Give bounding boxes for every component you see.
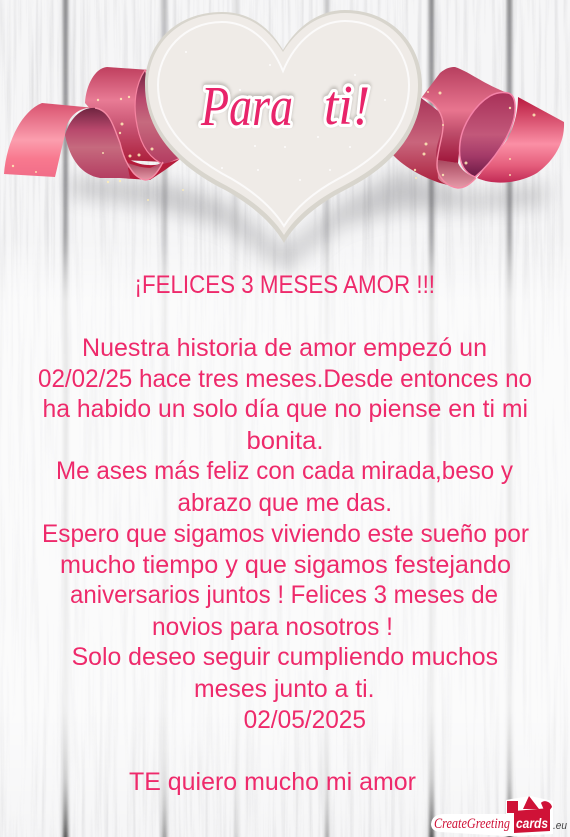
logo: CreateGreetingCards.eu (431, 796, 567, 836)
heart outer rim (145, 10, 422, 243)
paragraph 1 line 3: ha habido un solo día que no piense en ti mi (42, 395, 528, 423)
paragraph 3 line 1: Espero que sigamos viviendo este sueño por (42, 520, 529, 548)
heading line: ¡FELICES 3 MESES AMOR !!! (134, 271, 435, 299)
title word: Para: Para (200, 76, 293, 138)
middle fold of left ribbon (65, 108, 163, 180)
title shadow: Para (200, 74, 293, 136)
paragraph 1 line 1: Nuestra historia de amor empezó un (82, 334, 487, 362)
paragraph 2 line 1: Me ases más feliz con cada mirada,beso y (56, 457, 513, 485)
heart face (148, 13, 418, 235)
logo icon: gift, tree and heart (507, 796, 552, 815)
paragraph 3 line 3: aniversarios juntos ! Felices 3 meses de (70, 581, 498, 609)
paragraph 4 line 2: meses junto a ti. (194, 675, 374, 703)
logo white sticker backing (431, 796, 553, 836)
title shadow: ti! (324, 73, 370, 135)
paragraph 1 line 2: 02/02/25 hace tres meses.Desde entonces no (38, 365, 532, 393)
logo word: cards: cards (516, 815, 548, 831)
logo red box (514, 808, 550, 833)
paragraph 3 line 4: novios para nosotros ! (152, 613, 393, 641)
paragraph 4 line 1: Solo deseo seguir cumpliendo muchos (72, 643, 498, 671)
date: 02/05/2025 (244, 706, 366, 734)
logo word: CreateGreeting: CreateGreeting (434, 816, 510, 832)
paragraph 2 line 2: abrazo que me das. (178, 489, 392, 517)
left ribbon (4, 67, 182, 180)
lower left band of right ribbon (393, 97, 460, 188)
back loop of left ribbon (85, 67, 182, 162)
shadow under heart and ribbons (70, 170, 550, 270)
heart inner white line (158, 21, 409, 226)
title word: ti!: ti! (324, 75, 370, 137)
title shadow (200, 73, 370, 136)
top band of right ribbon (422, 67, 508, 163)
right ribbon (393, 67, 564, 188)
front end of left ribbon (4, 103, 95, 177)
logo word: .eu: .eu (553, 820, 567, 832)
message text (38, 271, 532, 796)
right end of right ribbon (477, 97, 564, 183)
bottom light fold of right ribbon (437, 160, 476, 188)
sparkles (12, 91, 536, 201)
paragraph 3 line 2: mucho tiempo y que sigamos festejando (60, 551, 511, 579)
paragraph 1 line 4: bonita. (246, 427, 324, 455)
heart (145, 10, 422, 243)
ribbon loop interior (460, 92, 515, 177)
closing line: TE quiero mucho mi amor (129, 768, 416, 796)
title: Para ti! (200, 75, 370, 138)
